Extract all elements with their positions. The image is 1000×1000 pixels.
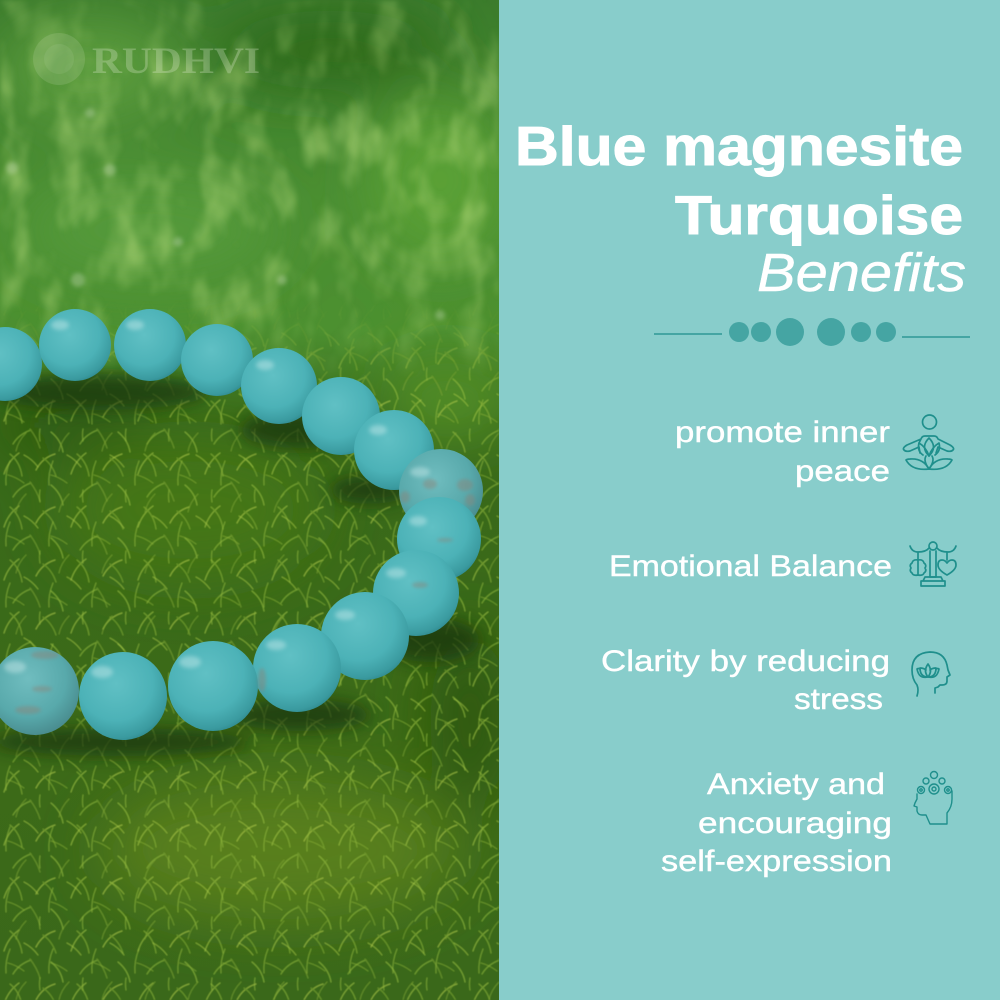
bead shadows (0, 374, 480, 756)
subheading: Benefits: Benefits (757, 243, 966, 303)
logo: RUDHVI watermark (33, 33, 260, 85)
turquoise beads (0, 309, 483, 740)
sharp lower grass (0, 300, 499, 1000)
benefit text: promote inner peace: peace (795, 455, 890, 488)
benefit text: Anxiety and encouraging self-expression: encouraging (698, 807, 892, 840)
benefit text: Anxiety and encouraging self-expression: self-expression (661, 845, 892, 878)
benefit text: promote inner peace (675, 416, 890, 488)
logo: RUDHVI watermark: RUDHVI (92, 41, 260, 82)
benefit text: Clarity by reducing stress: Clarity by reducing (601, 645, 890, 678)
photo: turquoise bracelet on grass (0, 0, 520, 1000)
benefit text: Clarity by reducing stress: stress (794, 683, 883, 716)
heading: Turquoise (675, 184, 963, 246)
benefit text: Anxiety and encouraging self-expression (661, 768, 892, 878)
blurred upper grass (0, 0, 499, 380)
icon: meditating figure with lotus (903, 415, 954, 469)
benefit text: Anxiety and encouraging self-expression: Anxiety and (707, 768, 885, 801)
benefit text: Clarity by reducing stress (601, 645, 890, 716)
icon: scales with brain and heart (910, 542, 956, 586)
heading: Blue magnesite (515, 115, 963, 177)
divider: dots and lines (654, 318, 970, 346)
heading (515, 115, 963, 246)
icon: head with lotus (912, 652, 950, 696)
bead highlights (4, 320, 430, 678)
bead matrix markings (15, 479, 475, 714)
panel: benefits (499, 0, 1000, 1000)
benefit text: promote inner peace: promote inner (675, 416, 890, 449)
icon: head with spirals (914, 772, 952, 824)
benefit text: Emotional Balance: Emotional Balance (609, 550, 892, 583)
